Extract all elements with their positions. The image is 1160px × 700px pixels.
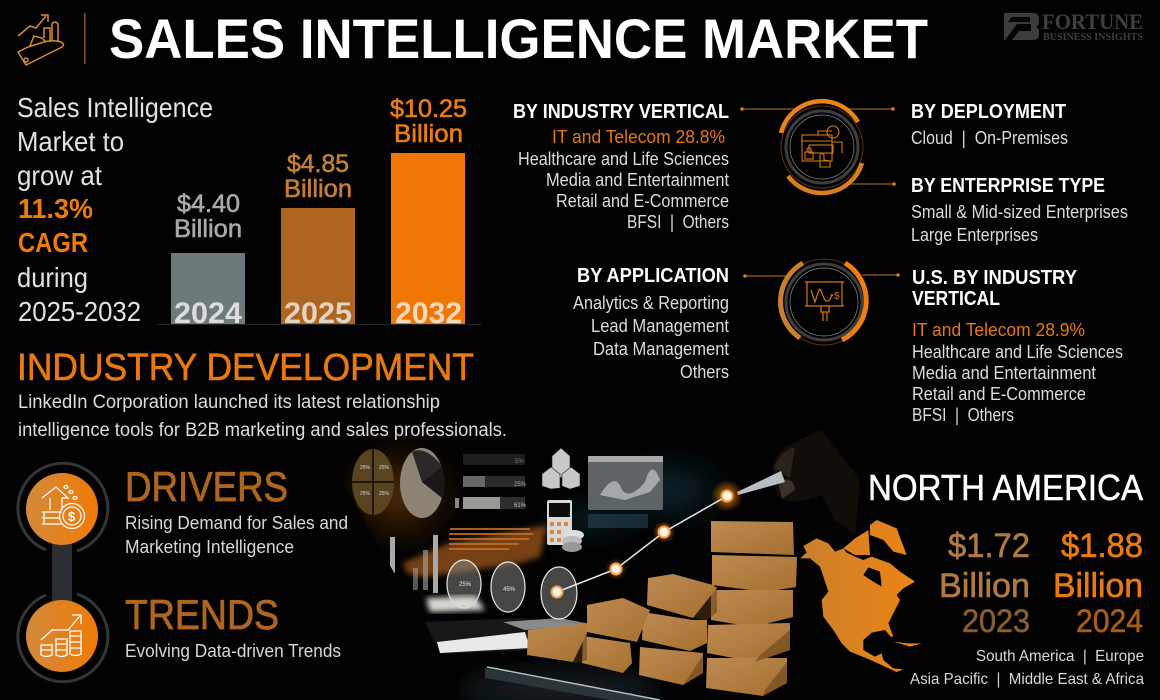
segment: U.S. by industry vertical: IT and Telecom 28.9% (912, 320, 1085, 340)
text block: industry development (18, 392, 507, 441)
photo: dashboard window (588, 456, 663, 528)
photo: pie charts: 25% (379, 465, 390, 471)
text block: CAGR statement: 11.3% (18, 193, 93, 224)
panel: North America stats (868, 467, 1144, 688)
segment: by application: BY APPLICATION (577, 265, 729, 287)
segment: U.S. by industry vertical: U.S. BY INDUSTRY (912, 267, 1078, 289)
panel: drivers: Marketing Intelligence (125, 537, 294, 557)
header icon: hand with growth chart (18, 15, 63, 65)
photo: pie charts (352, 448, 444, 518)
icon: security window badge with connectors (740, 101, 896, 193)
text block: CAGR statement: during (17, 262, 88, 293)
photo: hand and stylus (737, 430, 860, 535)
segment: by deployment: Cloud | On-Premises (911, 128, 1068, 148)
photo: progress bars: 5% (515, 459, 524, 465)
segment: by deployment: BY DEPLOYMENT (911, 101, 1066, 123)
segment: by application: Analytics & Reporting (573, 293, 729, 313)
bar 2024: $4.40 (177, 190, 240, 218)
icon: presentation board badge with connectors: $ (834, 291, 840, 302)
bar 2032: $10.25 (390, 95, 467, 123)
bar 2025: Billion (284, 175, 352, 203)
photo: dial labels: 25% (459, 582, 472, 588)
icon: drivers badge (18, 463, 108, 551)
segment: by deployment (911, 101, 1068, 148)
photo: box shadows (573, 588, 790, 696)
stat: 2024: 2024 (1076, 603, 1143, 639)
segment: by industry vertical: IT and Telecom 28.8% (552, 127, 725, 147)
segment: U.S. by industry vertical (912, 267, 1123, 425)
icon: presentation board badge with connectors (743, 259, 900, 345)
panel: trends (125, 591, 341, 661)
bar 2024 (171, 190, 245, 330)
photo: ambient glow (335, 435, 740, 700)
heading: industry development: INDUSTRY DEVELOPMENT (17, 347, 474, 389)
photo: dial labels: 45% (503, 587, 516, 593)
panel: trends: Evolving Data-driven Trends (125, 641, 341, 661)
stat: 2024 (1053, 527, 1143, 639)
segment: by industry vertical: BY INDUSTRY VERTICAL (513, 101, 729, 123)
photo: progress bars: 61% (514, 503, 527, 509)
text block: CAGR statement: grow at (17, 160, 102, 191)
text block: CAGR statement: 2025-2032 (18, 296, 141, 327)
photo: small bar chart (390, 535, 438, 593)
panel: drivers: Rising Demand for Sales and (125, 513, 348, 533)
photo: orange hand on laptop (403, 525, 547, 577)
panel: drivers (125, 463, 348, 557)
segment: by enterprise type: Small & Mid-sized Enterprises (911, 202, 1128, 222)
photo: glowing trend line (552, 480, 743, 598)
text block: industry development: intelligence tools for B2B marketing and sales professionals. (18, 420, 507, 441)
photo: stacked cardboard boxes (527, 521, 797, 696)
segment: by industry vertical: BFSI | Others (627, 212, 729, 232)
header divider (84, 13, 86, 64)
segment: by industry vertical: Media and Entertainment (546, 170, 729, 190)
photo: dial labels (459, 582, 516, 593)
text block: CAGR statement: Sales Intelligence (17, 92, 213, 123)
bar 2025: 2025 (284, 297, 352, 330)
segment: U.S. by industry vertical: BFSI | Others (912, 405, 1014, 425)
icon: drivers badge: $ (68, 509, 76, 524)
text block: CAGR statement: Market to (17, 126, 124, 157)
other regions: Asia Pacific | Middle East & Africa (910, 671, 1144, 688)
other regions: South America | Europe (976, 648, 1144, 665)
segment: U.S. by industry vertical: VERTICAL (912, 288, 1000, 310)
bar 2032: Billion (394, 120, 463, 148)
panel: trends: TRENDS (125, 591, 279, 638)
photo: progress bars (455, 454, 527, 509)
segment: by enterprise type: BY ENTERPRISE TYPE (911, 175, 1105, 197)
photo: pie charts: 25% (379, 491, 390, 497)
photo: pie charts: 25% (360, 465, 371, 471)
stat: 2023 (939, 527, 1030, 639)
photo: progress bars: 25% (514, 482, 527, 488)
bar 2025: $4.85 (287, 150, 349, 178)
photo: calculator and coins (547, 500, 584, 552)
photo: cube icons (542, 448, 580, 489)
segment: by industry vertical: Retail and E-Commerce (556, 191, 729, 211)
segment: by application: Lead Management (591, 316, 729, 336)
segment: by application (573, 265, 729, 382)
segment: by application: Others (680, 362, 729, 382)
photo: black diagonal mask (320, 430, 455, 700)
segment: by industry vertical (513, 101, 729, 232)
stat: 2023: 2023 (962, 603, 1030, 639)
stat: 2023: Billion (939, 567, 1030, 605)
bar 2024: 2024 (174, 297, 242, 330)
segment: by enterprise type: Large Enterprises (911, 225, 1038, 245)
photo: laptop keyboard (425, 596, 660, 700)
segment: by enterprise type (911, 175, 1128, 245)
segment: U.S. by industry vertical: Retail and E-Commerce (912, 384, 1086, 404)
segment: by industry vertical: Healthcare and Life Sciences (518, 149, 729, 169)
bar 2024: Billion (174, 215, 242, 243)
text block: CAGR statement (17, 92, 213, 327)
logo: Fortune Business Insights: FORTUNE (1042, 9, 1143, 34)
stat: 2023: $1.72 (948, 527, 1030, 565)
hero photo: laptop, holographic charts and cardboard boxes (320, 430, 860, 700)
segment: U.S. by industry vertical: Healthcare and Life Sciences (912, 342, 1123, 362)
icon: trends badge (18, 594, 108, 682)
segment: by application: Data Management (593, 339, 729, 359)
text block: industry development: LinkedIn Corporation launched its latest relationship (18, 392, 440, 413)
bar 2032 (390, 95, 467, 330)
title: SALES INTELLIGENCE MARKET (109, 7, 928, 70)
map: North America (800, 520, 922, 672)
bar chart: market size (156, 95, 482, 330)
stat: 2024: Billion (1053, 567, 1143, 605)
text block: CAGR statement: CAGR (18, 227, 88, 258)
segment: U.S. by industry vertical: Media and Entertainment (912, 363, 1096, 383)
other regions (910, 648, 1144, 688)
photo: orange text block (449, 528, 533, 550)
photo: pie charts: 25% (360, 491, 371, 497)
panel: drivers: DRIVERS (125, 463, 288, 510)
bar 2025 (281, 150, 355, 330)
logo: Fortune Business Insights: BUSINESS INSIGHTS (1043, 32, 1143, 43)
stat: 2024: $1.88 (1061, 527, 1143, 565)
connector: drivers to trends (52, 540, 72, 608)
bar 2032: 2032 (395, 297, 462, 330)
photo: donut dials (447, 560, 577, 619)
logo: Fortune Business Insights (1004, 9, 1143, 43)
panel: North America stats: NORTH AMERICA (868, 467, 1143, 508)
